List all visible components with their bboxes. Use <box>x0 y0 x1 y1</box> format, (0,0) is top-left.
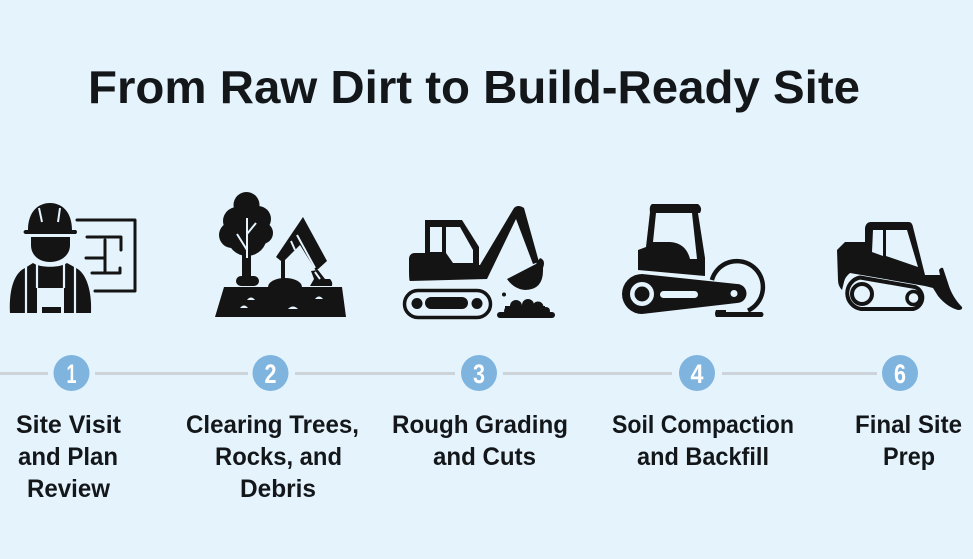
timeline connector <box>0 372 877 375</box>
label: step 6 <box>855 411 962 471</box>
title: From Raw Dirt to Build-Ready Site <box>88 61 860 113</box>
icon: excavator digging <box>404 206 555 318</box>
icon: tree, excavator arm and ground <box>215 192 346 317</box>
step 3 badge <box>461 355 497 391</box>
label: step 2: Clearing Trees, <box>186 411 359 439</box>
step 2 badge <box>252 355 288 391</box>
label: step 1: Review <box>27 475 111 503</box>
icon: bulldozer <box>837 222 962 310</box>
label: step 2: Debris <box>240 475 316 503</box>
label: step 1 <box>16 411 122 503</box>
label: step 2: Rocks, and <box>215 443 342 471</box>
label: step 1: and Plan <box>18 443 118 471</box>
label: step 6: Prep <box>883 443 935 471</box>
label: step 4: Soil Compaction <box>612 411 794 439</box>
label: step 6: Final Site <box>855 411 962 439</box>
label: step 4: and Backfill <box>637 443 769 471</box>
label: step 3: Rough Grading <box>392 411 568 439</box>
label: step 3: and Cuts <box>433 443 536 471</box>
label: step 3 <box>392 411 568 471</box>
label: step 2 <box>186 411 359 503</box>
step 4 badge: 4 <box>690 359 704 389</box>
label: step 4 <box>612 411 794 471</box>
icon: soil compactor roller <box>622 204 764 317</box>
step 6 badge: 6 <box>894 359 906 389</box>
step 1 badge: 1 <box>66 359 76 389</box>
step 6 badge <box>882 355 918 391</box>
step 3 badge: 3 <box>473 359 485 389</box>
step 1 badge <box>54 355 90 391</box>
step 2 badge: 2 <box>264 359 276 389</box>
icon: worker with blueprint <box>10 203 135 313</box>
label: step 1: Site Visit <box>16 411 122 439</box>
step 4 badge <box>679 355 715 391</box>
